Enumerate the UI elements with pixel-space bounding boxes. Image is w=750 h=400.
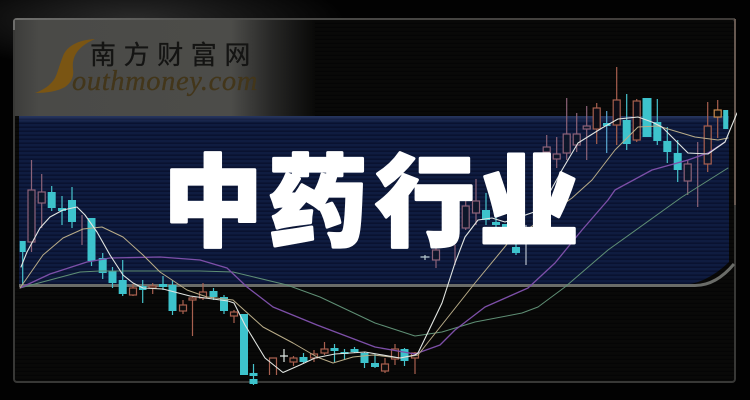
- title: [164, 122, 578, 266]
- candles: left rally and decline: [20, 160, 258, 385]
- title: 业: [480, 122, 578, 266]
- candlestick chart: [20, 67, 737, 385]
- moving average: green: [20, 168, 728, 336]
- moving average: tan: [20, 126, 728, 363]
- logo text: Chinese name: 南方财富网: [90, 35, 258, 72]
- candles: bottom consolidation: [270, 342, 418, 375]
- moving average: white: [21, 113, 737, 372]
- title: 药: [268, 122, 368, 266]
- panel: blue band: [19, 116, 734, 286]
- candles: right rally: [420, 67, 728, 268]
- panel: logo backdrop: [15, 20, 315, 116]
- icon: S swoosh: [35, 39, 95, 93]
- logo text: domain: outhmoney.com: [72, 66, 258, 97]
- title: 行: [376, 122, 474, 266]
- logo: Southmoney: [35, 35, 258, 97]
- moving average: purple: [20, 142, 725, 354]
- title: 中: [164, 122, 262, 266]
